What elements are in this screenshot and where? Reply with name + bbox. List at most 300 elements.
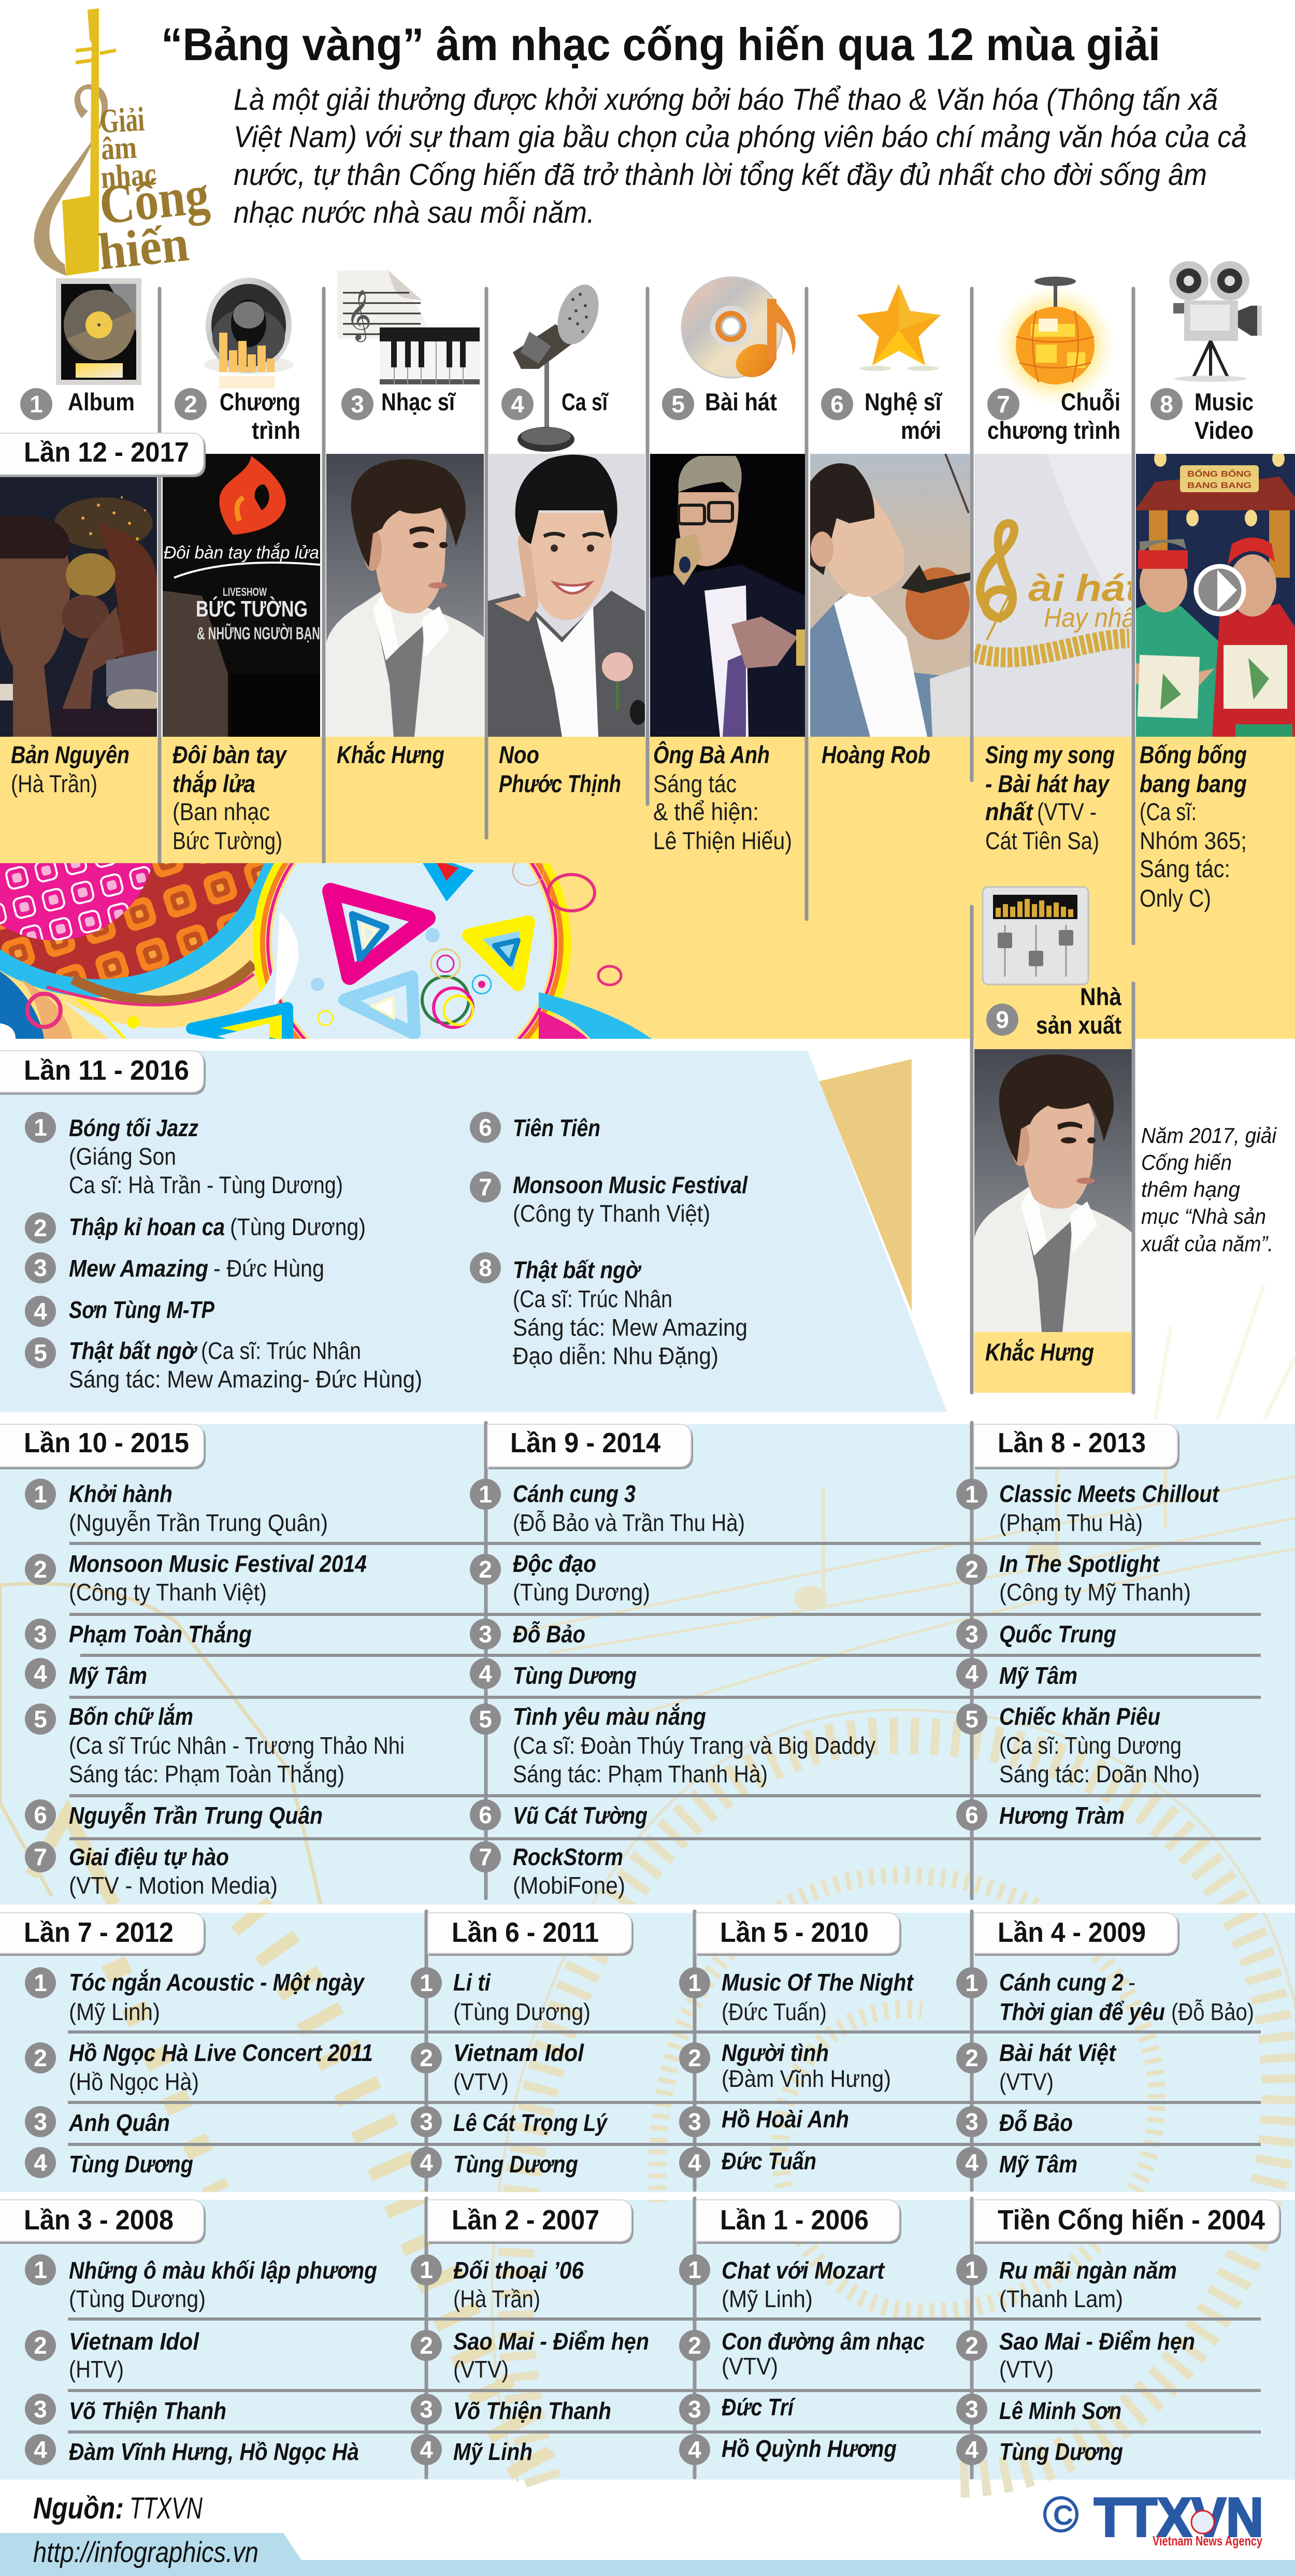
- item 4: Mỹ Tâm: [999, 2151, 1077, 2178]
- item 1: Cánh cung 2: [999, 1969, 1124, 1996]
- source: Nguồn:: [33, 2492, 124, 2525]
- item 3: [411, 2394, 611, 2425]
- panel backgrounds: lower seasons: [0, 1424, 1295, 2480]
- category labels with numbers: 7: [997, 391, 1010, 418]
- item 1: [25, 1967, 365, 2025]
- logo: TTXVN: C: [1053, 2500, 1073, 2531]
- yellow background band: [0, 737, 1295, 1039]
- item 5: Sáng tác: Doãn Nho): [999, 1761, 1200, 1787]
- logo: Giải âm nhạc Cống hiến: Giải: [99, 101, 146, 140]
- item 2: Vietnam Idol: [69, 2328, 199, 2355]
- item 2: Vietnam Idol: [453, 2039, 584, 2066]
- item 2: In The Spotlight: [999, 1550, 1160, 1577]
- item 1: [679, 2254, 885, 2312]
- item 2: Người tình: [722, 2039, 829, 2066]
- photo: Đôi bàn tay thắp lửa poster: LIVESHOW: [223, 585, 267, 598]
- item 1: (Tùng Dương): [69, 2285, 206, 2312]
- item 2: [956, 2039, 1117, 2095]
- item 2: Con đường âm nhạc: [722, 2328, 925, 2355]
- item 4: 4: [965, 1660, 979, 1687]
- tab: Lần 1 - 2006: Lần 1 - 2006: [720, 2205, 869, 2236]
- item 4: 4: [34, 2149, 47, 2176]
- category labels with numbers: Album: [68, 388, 135, 416]
- item 1: 1: [965, 1481, 979, 1508]
- caption strip: Lần 12 winners: (Ban nhạc: [172, 798, 270, 825]
- item 3: 3: [420, 2108, 433, 2135]
- caption: Khắc Hưng: Khắc Hưng: [985, 1338, 1094, 1366]
- item 1: Music Of The Night: [722, 1969, 914, 1996]
- tab: Tiền Cống hiến - 2004: Tiền Cống hiến - 2004: [998, 2205, 1265, 2236]
- icon: disco ball: [994, 277, 1116, 407]
- item: Thật bất ngờ video: Sáng tác: Mew Amazing: [513, 1314, 747, 1341]
- category labels with numbers: trình: [252, 417, 300, 444]
- item 1: Thời gian để yêu: [999, 1998, 1165, 2025]
- item 2: [679, 2039, 891, 2092]
- item 4: Tùng Dương: [69, 2151, 193, 2178]
- category labels with numbers: 2: [184, 391, 197, 418]
- item 6: [956, 1799, 1125, 1830]
- source: TTXVN: [130, 2492, 203, 2525]
- item: Thật bất ngờ: [25, 1337, 422, 1393]
- category labels with numbers: chương trình: [987, 417, 1120, 444]
- category labels with numbers: 5: [671, 391, 685, 418]
- item 3: 3: [420, 2396, 433, 2423]
- caption strip: Lần 12 winners: Ông Bà Anh: [653, 741, 770, 768]
- tab: Tiền Cống hiến - 2004: [974, 2200, 1279, 2241]
- item: Mew Amazing: [25, 1252, 324, 1283]
- item 2: 2: [965, 2332, 979, 2359]
- tab: Lần 7 - 2012: [0, 1913, 204, 1953]
- item 3: [679, 2106, 849, 2137]
- list: Lần 9 - 2014: [470, 1479, 875, 1899]
- icon: film projector: [1169, 261, 1262, 382]
- item 1: [470, 1479, 745, 1536]
- item 1: (Đỗ Bảo): [1171, 1998, 1254, 2025]
- item: Sơn Tùng M-TP: [25, 1296, 214, 1327]
- item 5: Sáng tác: Phạm Thanh Hà): [513, 1761, 768, 1787]
- item 1: (Thanh Lam): [999, 2285, 1123, 2312]
- item 1: (Hà Trần): [453, 2285, 540, 2312]
- item 4: Tùng Dương: [513, 1662, 637, 1689]
- caption strip: Lần 12 winners: thắp lửa: [172, 770, 255, 797]
- item 3: [956, 1619, 1116, 1650]
- item 4: Mỹ Linh: [453, 2438, 533, 2465]
- list: Lần 1 - 2006: [679, 2254, 925, 2465]
- item 1: Tóc ngắn Acoustic - Một ngày: [69, 1969, 365, 1996]
- item 7: [470, 1841, 625, 1899]
- item 7: (VTV - Motion Media): [69, 1872, 278, 1899]
- icon: mixer console: [983, 887, 1088, 984]
- category labels with numbers: Chương: [220, 388, 300, 416]
- category labels with numbers: Chuỗi: [1061, 388, 1120, 416]
- item: Monsoon Music Festival: (Công ty Thanh Việt): [513, 1200, 710, 1227]
- item 4: [470, 1658, 637, 1689]
- item 2: (Đàm Vĩnh Hưng): [722, 2065, 891, 2092]
- photo: Bản Nguyên: [0, 477, 157, 737]
- note: new category in 2017: Cống hiến: [1141, 1150, 1232, 1175]
- item 4: Hồ Quỳnh Hương: [722, 2435, 897, 2462]
- item: Thật bất ngờ video: (Ca sĩ: Trúc Nhân: [513, 1285, 672, 1312]
- tab: Lần 1 - 2006: [696, 2200, 899, 2241]
- list: Lần 5 - 2010: [679, 1967, 914, 2178]
- item 2: Bài hát Việt: [999, 2039, 1117, 2066]
- caption strip: Lần 12 winners: [11, 741, 1247, 912]
- photo: Khắc Hưng: [326, 454, 484, 737]
- tab: Lần 5 - 2010: Lần 5 - 2010: [720, 1917, 869, 1948]
- item: Thập kỉ hoan ca: [25, 1212, 366, 1243]
- item 2: (VTV): [722, 2353, 778, 2380]
- item 4: Tùng Dương: [453, 2151, 578, 2178]
- item: Monsoon Music Festival: 7: [479, 1173, 492, 1200]
- item 3: Lê Minh Sơn: [999, 2397, 1121, 2424]
- caption strip: Lần 12 winners: Bức Tường): [172, 827, 282, 854]
- intro text block: nhạc nước nhà sau mỗi năm.: [234, 196, 595, 230]
- photo: Noo Phước Thịnh: [488, 454, 645, 737]
- caption strip: Lần 12 winners: Lê Thiện Hiếu): [653, 827, 792, 854]
- caption strip: Lần 12 winners: Noo: [499, 741, 539, 768]
- item 5: (Ca sĩ: Tùng Dương: [999, 1732, 1182, 1759]
- caption strip: Lần 12 winners: bang bang: [1140, 770, 1247, 797]
- tab: Lần 4 - 2009: Lần 4 - 2009: [998, 1917, 1146, 1948]
- item 3: [679, 2394, 796, 2425]
- list: Lần 10 - 2015: [25, 1479, 405, 1899]
- item 3: Đỗ Bảo: [513, 1621, 585, 1648]
- tab: Lần 3 - 2008: Lần 3 - 2008: [24, 2205, 174, 2236]
- item 1: (Phạm Thu Hà): [999, 1509, 1143, 1536]
- list: Lần 8 - 2013: [956, 1479, 1219, 1830]
- item 1: 1: [34, 1969, 47, 1996]
- item 1: [679, 1967, 914, 2025]
- item 4: 4: [479, 1660, 492, 1687]
- item 2: [956, 2328, 1195, 2383]
- item 2: 2: [479, 1556, 492, 1583]
- label: category 9: [986, 983, 1122, 1039]
- note: new category in 2017: Năm 2017, giải: [1141, 1123, 1277, 1148]
- item 1: (Tùng Dương): [453, 1998, 591, 2025]
- label: category 9: sản xuất: [1036, 1011, 1121, 1039]
- item 2: 2: [688, 2332, 701, 2359]
- item 2: 2: [965, 2044, 979, 2071]
- item: Thật bất ngờ video: Đạo diễn: Nhu Đặng): [513, 1342, 718, 1369]
- category labels with numbers: [20, 388, 1254, 444]
- item 3: Phạm Toàn Thắng: [69, 1621, 252, 1648]
- divider lines: category 9: [972, 907, 1133, 1393]
- item: Bóng tối Jazz: (Giáng Son: [69, 1143, 176, 1170]
- tab: Lần 12 - 2017: [0, 433, 204, 475]
- item 1: 1: [965, 1969, 979, 1996]
- caption strip: Lần 12 winners: & thể hiện:: [653, 798, 759, 825]
- item 4: 4: [420, 2149, 433, 2176]
- item 2: Hồ Ngọc Hà Live Concert 2011: [69, 2039, 373, 2066]
- icon: microphone on stand: [513, 279, 606, 452]
- item: Sơn Tùng M-TP: 4: [34, 1298, 47, 1325]
- category labels with numbers: Ca sĩ: [562, 388, 609, 416]
- item: Thập kỉ hoan ca: 2: [34, 1214, 47, 1241]
- item 3: [411, 2106, 608, 2137]
- item 1: -: [1128, 1969, 1135, 1996]
- photo: Bống bống bang bang with play button: [1136, 454, 1295, 737]
- caption strip: Lần 12 winners: Khắc Hưng: [337, 741, 444, 768]
- item 2: [25, 1550, 367, 1606]
- item 7: Giai điệu tự hào: [69, 1843, 229, 1870]
- item 2: 2: [965, 1556, 979, 1583]
- caption strip: Lần 12 winners: (VTV -: [1037, 798, 1097, 825]
- category labels with numbers: 6: [830, 391, 844, 418]
- icon: album: [56, 278, 141, 385]
- item 2: [679, 2328, 925, 2380]
- item 2: [411, 2328, 649, 2383]
- item: Mew Amazing: Mew Amazing: [69, 1255, 208, 1282]
- item 1: Khởi hành: [69, 1480, 172, 1507]
- photo: Ông Bà Anh: [650, 454, 805, 737]
- icon: sheet music and piano keys: [337, 270, 480, 384]
- item 1: Cánh cung 3: [513, 1480, 636, 1507]
- item 5: 5: [965, 1706, 979, 1733]
- item 4: [679, 2434, 897, 2465]
- item 1: Những ô màu khối lập phương: [69, 2257, 377, 2284]
- item 2: [25, 2039, 373, 2095]
- category labels with numbers: mới: [901, 417, 941, 444]
- caption strip: Lần 12 winners: - Bài hát hay: [985, 770, 1110, 797]
- yellow panel: category 9 producer: [974, 1039, 1131, 1393]
- item 3: [25, 2394, 226, 2425]
- item 6: 6: [34, 1801, 47, 1828]
- tab: Lần 5 - 2010: [696, 1913, 899, 1953]
- photo: Bống bống bang bang with play button: BỐNG BỐNG: [1187, 468, 1251, 479]
- intro text block: Là một giải thưởng được khởi xướng bởi báo Thể thao & Văn hóa (Thông tấn xã: [234, 83, 1218, 117]
- list: Lần 4 - 2009: [956, 1967, 1254, 2178]
- item 3: 3: [688, 2396, 701, 2423]
- item 1: 1: [479, 1481, 492, 1508]
- logo: TTXVN: Vietnam News Agency: [1153, 2533, 1262, 2549]
- item 1: [956, 1967, 1254, 2025]
- item: Thật bất ngờ video: Thật bất ngờ: [513, 1256, 642, 1283]
- item 3: 3: [34, 1621, 47, 1648]
- item 5: 5: [479, 1706, 492, 1733]
- item 3: 3: [479, 1621, 492, 1648]
- item 4: [679, 2147, 816, 2178]
- caption strip: Lần 12 winners: Phước Thịnh: [499, 770, 621, 797]
- note: new category in 2017: xuất của năm”.: [1140, 1232, 1273, 1256]
- intro text block: Việt Nam) với sự tham gia bầu chọn của phóng viên báo chí mảng văn hóa của cả: [234, 120, 1247, 154]
- item: Thật bất ngờ: Thật bất ngờ: [69, 1337, 198, 1364]
- tab: Lần 3 - 2008: [0, 2200, 204, 2241]
- item: Tiên Tiên: 6: [479, 1114, 492, 1141]
- tab: Lần 10 - 2015: [0, 1424, 204, 1467]
- category labels with numbers: Music: [1195, 388, 1254, 416]
- photo: Đôi bàn tay thắp lửa poster: Đôi bàn tay thắp lửa: [164, 543, 319, 563]
- tab: Lần 8 - 2013: [974, 1424, 1177, 1467]
- item 4: Mỹ Tâm: [999, 1662, 1077, 1689]
- item: Mew Amazing: 3: [34, 1254, 47, 1281]
- item 2: (VTV): [999, 2068, 1054, 2095]
- item 1: Li ti: [453, 1969, 491, 1996]
- item 3: [470, 1619, 585, 1650]
- tab: Lần 2 - 2007: [428, 2200, 631, 2241]
- item 6: Nguyễn Trần Trung Quân: [69, 1802, 323, 1829]
- item 4: Tùng Dương: [999, 2438, 1123, 2465]
- item: Thật bất ngờ: (Ca sĩ: Trúc Nhân: [201, 1337, 361, 1364]
- title: “Bảng vàng” âm nhạc cống hiến qua 12 mùa giải: [161, 19, 1160, 70]
- item 3: [956, 2394, 1121, 2425]
- item 4: Đàm Vĩnh Hưng, Hồ Ngọc Hà: [69, 2438, 359, 2465]
- list: Tiền Cống hiến - 2004: [956, 2254, 1195, 2465]
- item: Thật bất ngờ: Sáng tác: Mew Amazing- Đức Hùng): [69, 1366, 422, 1393]
- item 5: Bốn chữ lắm: [69, 1703, 193, 1730]
- tab: Lần 7 - 2012: Lần 7 - 2012: [24, 1917, 174, 1948]
- item 7: RockStorm: [513, 1843, 623, 1870]
- item 3: [25, 1619, 252, 1650]
- item 3: Võ Thiện Thanh: [453, 2397, 611, 2424]
- item 1: 1: [420, 2256, 433, 2283]
- item 4: [411, 2434, 533, 2465]
- panel: Lần 11 - 2016: [0, 1051, 947, 1412]
- intro text block: [234, 83, 1247, 230]
- list: Lần 3 - 2008: [25, 2254, 377, 2465]
- tab: Lần 8 - 2013: Lần 8 - 2013: [998, 1427, 1146, 1458]
- icon: star: [857, 284, 941, 371]
- item 2: 2: [34, 2044, 47, 2071]
- item 2: 2: [420, 2044, 433, 2071]
- item 1: (Mỹ Linh): [69, 1998, 160, 2025]
- item 4: [956, 2434, 1123, 2465]
- tab: Lần 6 - 2011: [428, 1913, 631, 1953]
- item 2: (Công ty Mỹ Thanh): [999, 1579, 1191, 1606]
- tab: Lần 6 - 2011: Lần 6 - 2011: [452, 1917, 599, 1948]
- logo: Giải âm nhạc Cống hiến: nhạc: [99, 156, 157, 195]
- item 2: [956, 1550, 1191, 1606]
- watermark: music staff and piano spiral: [0, 1435, 1295, 2482]
- item 5: [470, 1703, 875, 1787]
- item 4: 4: [420, 2436, 433, 2463]
- item: Sơn Tùng M-TP: Sơn Tùng M-TP: [69, 1296, 214, 1323]
- item: Bóng tối Jazz: [25, 1112, 343, 1198]
- divider lines: Lần 7, 6, 5, 4: [68, 1911, 1261, 2190]
- logo: Giải âm nhạc Cống hiến: Cống: [96, 164, 212, 236]
- item 2: Sao Mai - Điểm hẹn: [453, 2328, 649, 2355]
- list: Lần 6 - 2011: [411, 1967, 608, 2178]
- item 6: [25, 1799, 323, 1830]
- icon: CD with music note: [682, 277, 796, 383]
- item 4: [25, 2434, 359, 2465]
- item 1: 1: [34, 1481, 47, 1508]
- item: Bóng tối Jazz: 1: [34, 1114, 47, 1141]
- caption strip: Lần 12 winners: Cát Tiên Sa): [985, 827, 1099, 854]
- item 6: [470, 1799, 648, 1830]
- item 7: 7: [34, 1843, 47, 1870]
- category labels with numbers: Nghệ sĩ: [865, 388, 943, 416]
- item 1: (Đức Tuấn): [722, 1998, 827, 2025]
- note: new category in 2017: thêm hạng: [1141, 1177, 1240, 1201]
- list: Lần 2 - 2007: [411, 2254, 649, 2465]
- item 1: (Mỹ Linh): [722, 2285, 813, 2312]
- caption strip: Lần 12 winners: Hoàng Rob: [822, 741, 930, 768]
- logo: TTXVN: TTXVN: [1094, 2487, 1263, 2548]
- item 5: Sáng tác: Phạm Toàn Thắng): [69, 1761, 344, 1787]
- item 3: Đỗ Bảo: [999, 2109, 1073, 2136]
- item 1: 1: [965, 2256, 979, 2283]
- caption strip: Lần 12 winners: Sing my song: [985, 741, 1115, 768]
- item 4: [25, 2147, 193, 2178]
- item 3: 3: [965, 2108, 979, 2135]
- white gaps between panels: [0, 1905, 1295, 2200]
- tab: Lần 12 - 2017: Lần 12 - 2017: [24, 437, 189, 468]
- item 1: Ru mãi ngàn năm: [999, 2257, 1177, 2284]
- item 4: Mỹ Tâm: [69, 1662, 147, 1689]
- tab: Lần 11 - 2016: Lần 11 - 2016: [24, 1055, 189, 1086]
- item 6: Vũ Cát Tường: [513, 1802, 648, 1829]
- item 2: (Tùng Dương): [513, 1579, 650, 1606]
- note: new category in 2017: [1140, 1123, 1277, 1256]
- item 2: (VTV): [999, 2356, 1054, 2383]
- item 7: [25, 1841, 278, 1899]
- item 3: 3: [965, 1621, 979, 1648]
- item 3: Anh Quân: [68, 2109, 170, 2136]
- item 6: 6: [965, 1801, 979, 1828]
- item: Thập kỉ hoan ca: (Tùng Dương): [230, 1213, 366, 1240]
- item 5: Chiếc khăn Piêu: [999, 1703, 1160, 1730]
- item 3: 3: [34, 2396, 47, 2423]
- icon: sheet music and piano keys: 𝄞: [346, 289, 372, 342]
- item 3: Quốc Trung: [999, 1621, 1116, 1648]
- item 2: [411, 2039, 584, 2095]
- photo: Hoàng Rob: [810, 454, 970, 737]
- item 5: [956, 1703, 1200, 1787]
- item 2: Độc đạo: [513, 1550, 596, 1577]
- item 2: (HTV): [69, 2356, 124, 2383]
- item: Bóng tối Jazz: Ca sĩ: Hà Trần - Tùng Dương): [69, 1171, 343, 1198]
- caption strip: Lần 12 winners: Đôi bàn tay: [172, 741, 287, 768]
- logo: Giải âm nhạc Cống hiến: hiến: [96, 214, 191, 281]
- tab: Lần 9 - 2014: Lần 9 - 2014: [510, 1427, 660, 1458]
- list: Lần 7 - 2012: [25, 1967, 373, 2178]
- item 1: (Đỗ Bảo và Trần Thu Hà): [513, 1509, 745, 1536]
- item 4: [956, 1658, 1077, 1689]
- item 6: 6: [479, 1801, 492, 1828]
- item 1: [411, 1967, 591, 2025]
- item 5: [25, 1703, 405, 1787]
- item 1: [25, 2254, 377, 2312]
- item: Thập kỉ hoan ca: Thập kỉ hoan ca: [69, 1213, 225, 1240]
- item: Thật bất ngờ video: 8: [479, 1254, 492, 1281]
- tab: Lần 2 - 2007: Lần 2 - 2007: [452, 2205, 599, 2236]
- category labels with numbers: 4: [511, 391, 524, 418]
- caption strip: Lần 12 winners: Bống bống: [1140, 741, 1247, 768]
- item 2: Sao Mai - Điểm hẹn: [999, 2328, 1195, 2355]
- item 4: 4: [34, 2436, 47, 2463]
- item 1: Classic Meets Chillout: [999, 1480, 1219, 1507]
- item 2: [25, 2328, 199, 2383]
- item 4: [411, 2147, 578, 2178]
- item 4: Đức Tuấn: [722, 2148, 816, 2174]
- icon: speaker with equalizer: [204, 278, 294, 389]
- divider lines: Lần 10, 9, 8: [69, 1423, 1261, 1898]
- caption strip: Lần 12 winners: Nhóm 365;: [1140, 827, 1247, 854]
- item: Mew Amazing: - Đức Hùng: [213, 1255, 324, 1282]
- column divider lines: award categories: [160, 289, 1133, 943]
- faint notes at right: [1155, 1285, 1295, 1420]
- category labels with numbers: 3: [351, 391, 364, 418]
- item: Thật bất ngờ video: [470, 1252, 747, 1369]
- item 1: [956, 1479, 1219, 1536]
- item 2: 2: [34, 1556, 47, 1583]
- item 1: Chat với Mozart: [722, 2257, 885, 2284]
- item 4: 4: [965, 2149, 979, 2176]
- item 2: 2: [420, 2332, 433, 2359]
- item 2: [470, 1550, 650, 1606]
- item 2: Monsoon Music Festival 2014: [69, 1550, 367, 1577]
- logo: Giải âm nhạc Cống hiến: âm: [100, 130, 138, 167]
